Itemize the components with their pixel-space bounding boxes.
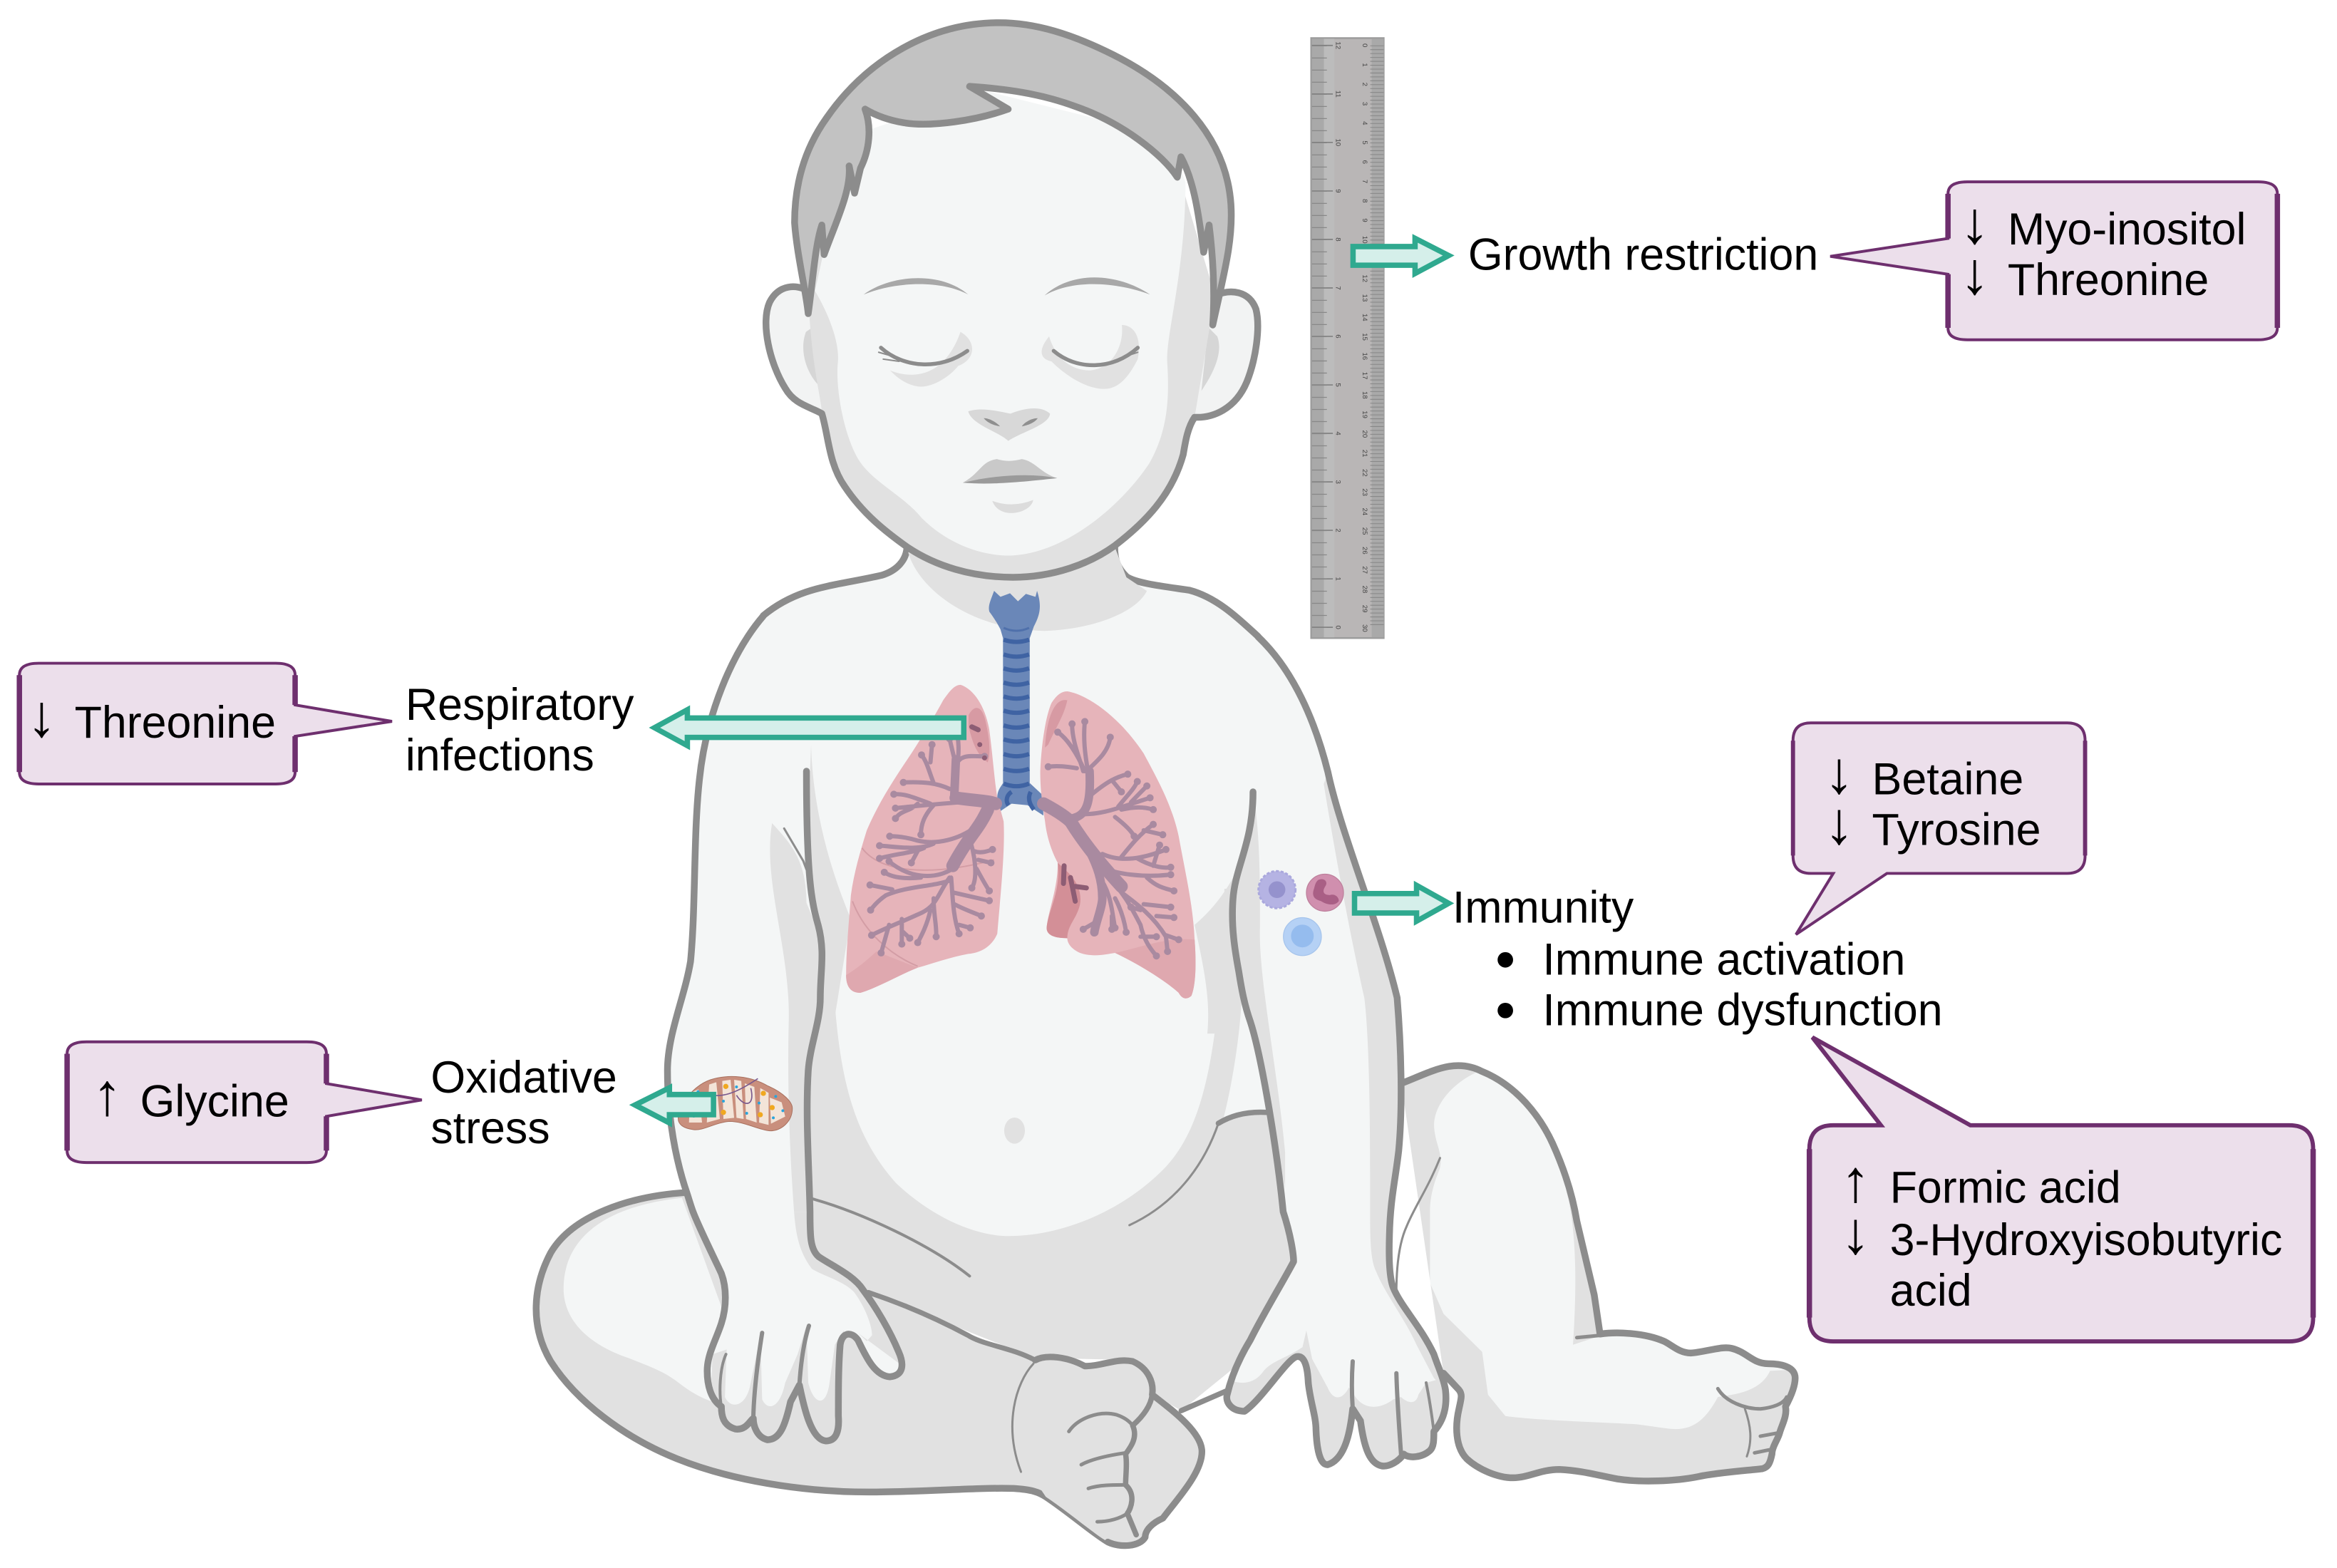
left leg: [536, 1192, 1202, 1546]
ruler inch numbers: 1: [1333, 577, 1341, 581]
ruler cm numbers: 22: [1361, 469, 1368, 477]
ears: [766, 287, 1258, 418]
callout: myo-inositol and threonine: Threonine: [2008, 255, 2209, 305]
ruler cm numbers: 24: [1361, 507, 1368, 516]
ruler inch numbers: 6: [1333, 334, 1341, 339]
ruler cm numbers: 5: [1361, 140, 1368, 145]
callout: glycine: [67, 1042, 422, 1162]
right arm: [1219, 636, 1459, 1473]
callout: glycine: ↑: [93, 1061, 122, 1128]
face highlight: [815, 91, 1185, 555]
callout: betaine and tyrosine: ↓: [1825, 739, 1854, 806]
ruler cm numbers: 1: [1361, 63, 1368, 67]
callout: threonine: [19, 664, 392, 784]
callout: glycine: Glycine: [140, 1076, 289, 1126]
immune cells: [1259, 871, 1343, 956]
left lung: [846, 685, 1004, 993]
callout: myo-inositol and threonine: [1830, 182, 2277, 340]
ruler inch numbers: [1333, 41, 1341, 629]
ruler cm numbers: 14: [1361, 314, 1368, 321]
ruler inch numbers: 0: [1333, 625, 1341, 629]
callout: threonine: ↓: [27, 682, 56, 749]
ruler cm numbers: [1361, 43, 1368, 632]
ruler cm numbers: 26: [1361, 547, 1368, 555]
ruler cm numbers: 28: [1361, 586, 1368, 593]
label: respiratory infections: infections: [406, 731, 594, 780]
ruler inch numbers: 8: [1333, 237, 1341, 242]
callout: formic acid and 3-hydroxyisobutyric acid: ↓: [1841, 1200, 1870, 1267]
right leg: [1386, 1066, 1815, 1497]
arrow: oxidative stress: [635, 1088, 713, 1123]
callout: formic acid and 3-hydroxyisobutyric acid: acid: [1890, 1266, 1972, 1316]
right lung: [1041, 691, 1195, 999]
label: oxidative stress: stress: [430, 1103, 550, 1153]
label: immunity: [1453, 882, 1943, 1036]
ruler inch numbers: 7: [1333, 286, 1341, 290]
callout: formic acid and 3-hydroxyisobutyric acid: [1810, 1037, 2313, 1341]
label: respiratory infections: Respiratory: [406, 680, 634, 730]
callout: myo-inositol and threonine: Myo-inositol: [2008, 205, 2246, 254]
label: immunity: Immune dysfunction: [1542, 986, 1943, 1036]
face: [808, 136, 1215, 577]
neck shadow: [908, 548, 1147, 631]
callout: formic acid and 3-hydroxyisobutyric acid: ↑: [1841, 1147, 1870, 1214]
hair: [795, 23, 1232, 325]
callout: betaine and tyrosine: [1793, 723, 2085, 934]
mitochondrion: [679, 1076, 793, 1131]
callout: betaine and tyrosine: Betaine: [1872, 755, 2023, 805]
shoulders outline: [763, 545, 1258, 636]
torso: [707, 545, 1315, 1410]
ruler cm numbers: 2: [1361, 83, 1368, 86]
ruler cm numbers: 7: [1361, 180, 1368, 183]
callout: myo-inositol and threonine: ↓: [1960, 189, 1990, 256]
ruler cm numbers: 10: [1361, 236, 1368, 244]
label: oxidative stress: Oxidative: [430, 1053, 617, 1103]
ruler cm numbers: 30: [1361, 624, 1368, 632]
ruler inch numbers: 12: [1333, 41, 1341, 49]
ruler cm numbers: 8: [1361, 199, 1368, 202]
bronchial tree: [870, 721, 1179, 956]
baby illustration: [536, 23, 1815, 1546]
ruler inch numbers: 10: [1333, 138, 1341, 146]
ruler cm numbers: 6: [1361, 160, 1368, 164]
label: immunity: Immunity: [1453, 882, 1634, 932]
ruler cm numbers: 20: [1361, 430, 1368, 438]
pink cell: [1306, 874, 1343, 911]
purple cell: [1259, 871, 1296, 908]
callout: formic acid and 3-hydroxyisobutyric acid: Formic acid: [1890, 1163, 2121, 1213]
ruler cm numbers: 3: [1361, 102, 1368, 105]
arrow: respiratory infections: [654, 710, 964, 746]
ruler inch numbers: 9: [1333, 189, 1341, 193]
ruler: [1311, 38, 1383, 638]
ruler cm numbers: 18: [1361, 391, 1368, 399]
ruler cm numbers: 11: [1361, 256, 1368, 263]
left arm: [668, 616, 925, 1445]
callout: threonine: Threonine: [75, 698, 276, 748]
ruler cm numbers: 29: [1361, 605, 1368, 612]
ruler cm numbers: 12: [1361, 274, 1368, 282]
trachea and larynx: [989, 591, 1043, 815]
ruler cm numbers: 25: [1361, 527, 1368, 535]
nose: [968, 408, 1050, 441]
ruler inch numbers: 5: [1333, 383, 1341, 387]
ruler cm numbers: 27: [1361, 566, 1368, 574]
blue cell: [1284, 917, 1321, 956]
front foot: [869, 1292, 1202, 1546]
ruler cm numbers: 15: [1361, 333, 1368, 341]
ruler inch numbers: 2: [1333, 528, 1341, 532]
ruler inch numbers: 3: [1333, 480, 1341, 484]
ruler cm numbers: 4: [1361, 121, 1368, 125]
label: growth restriction: Growth restriction: [1468, 230, 1818, 280]
ruler cm numbers: 13: [1361, 294, 1368, 301]
ruler cm numbers: 23: [1361, 488, 1368, 496]
closed eyes: [881, 348, 1137, 365]
ruler cm numbers: 9: [1361, 218, 1368, 222]
ruler cm numbers: 19: [1361, 411, 1368, 418]
callout: myo-inositol and threonine: ↓: [1960, 239, 1990, 306]
ruler inch numbers: 11: [1333, 91, 1341, 98]
head outline: [766, 287, 1258, 577]
ruler cm numbers: 16: [1361, 352, 1368, 360]
label: immunity: Immune activation: [1542, 935, 1905, 985]
respiratory system: [846, 591, 1195, 999]
callout: formic acid and 3-hydroxyisobutyric acid: 3-Hydroxyisobutyric: [1890, 1215, 2282, 1265]
arrow: growth restriction: [1353, 238, 1449, 274]
ruler cm numbers: 17: [1361, 372, 1368, 379]
arrow: immunity: [1355, 885, 1449, 922]
ruler cm numbers: 21: [1361, 450, 1368, 457]
ruler inch numbers: 4: [1333, 431, 1341, 435]
labels and callouts: [19, 182, 2313, 1341]
head: [766, 23, 1258, 577]
eye shadows: [890, 325, 1139, 389]
callout: betaine and tyrosine: Tyrosine: [1872, 805, 2041, 855]
ruler cm numbers: 0: [1361, 43, 1368, 47]
mouth: [963, 459, 1057, 483]
eyebrows: [864, 277, 1150, 296]
callout: betaine and tyrosine: ↓: [1825, 790, 1854, 857]
